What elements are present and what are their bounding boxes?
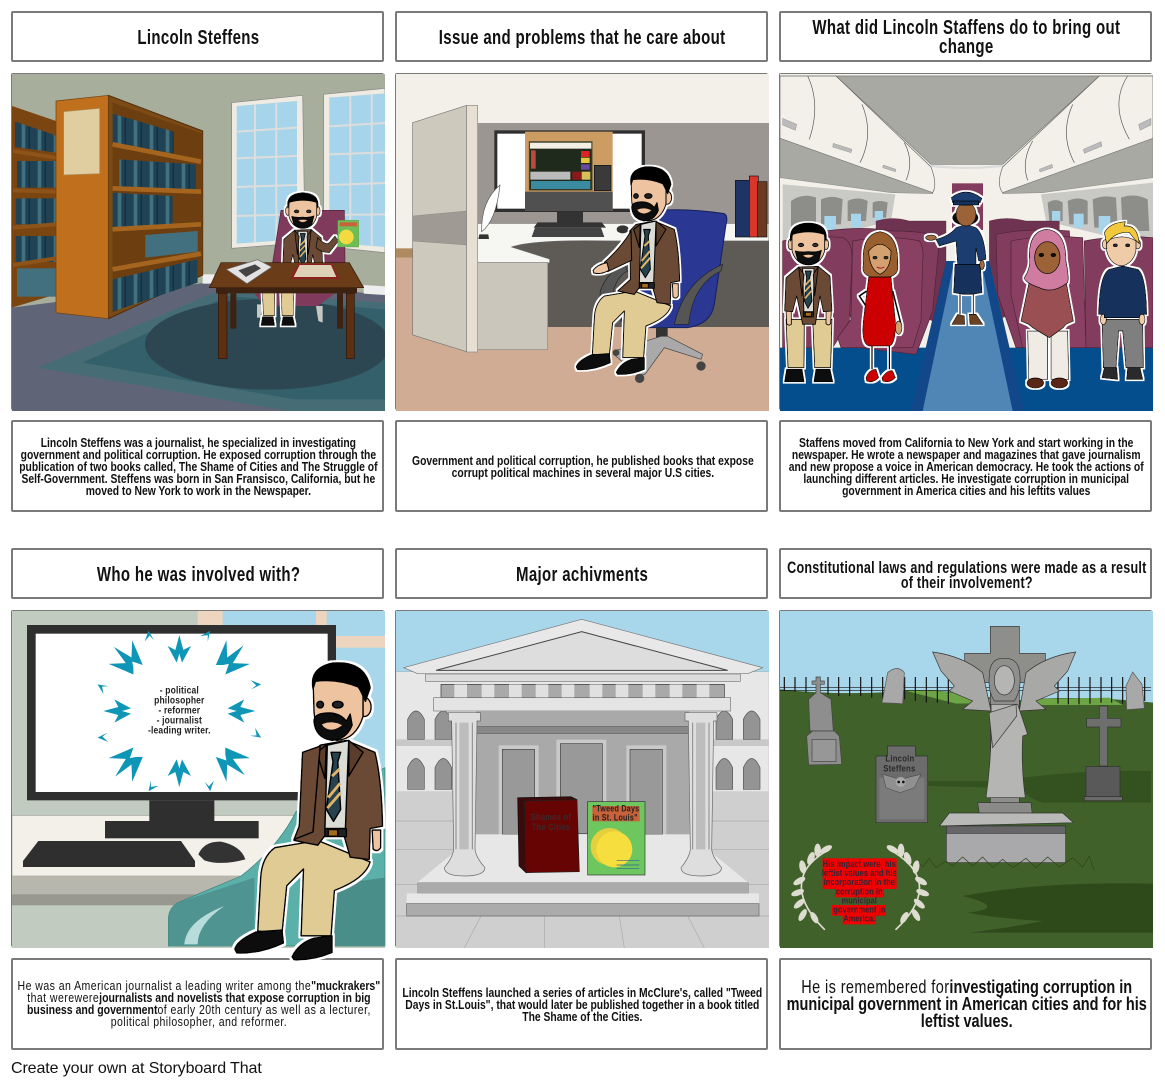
red impact note: municipal <box>842 896 877 906</box>
plaza floor <box>396 792 769 948</box>
front bookcase <box>56 95 203 319</box>
text: actions <box>779 420 1152 512</box>
character: Steffens at desk <box>261 193 338 325</box>
right column <box>681 713 722 876</box>
icon: quill <box>478 185 500 239</box>
red impact note: leftist values and his <box>822 868 897 878</box>
burst text: philosopher <box>154 695 205 706</box>
red impact note <box>822 858 897 924</box>
temple steps <box>407 834 759 916</box>
carpet and aisle <box>780 261 1153 411</box>
office chair <box>599 210 727 383</box>
desk <box>12 815 305 905</box>
left column <box>444 713 485 876</box>
green magazine: Tweed Days: in St. Louis" <box>593 813 638 823</box>
floor and rug <box>12 274 390 411</box>
character: flight attendant <box>926 192 986 324</box>
back bookcase <box>12 106 56 308</box>
character: woman in hijab <box>1021 229 1073 388</box>
title: Issue and problems: Issue and problems that he care about <box>439 26 726 48</box>
text: remembered: He is remembered forinvestigating corruption in <box>801 976 1132 996</box>
text: achievements: Days in St.Louis", that would later be published together in a book titled <box>405 997 760 1012</box>
text: Lincoln Steffens biography: government and political corruption. He exposed corruption through the <box>21 447 376 462</box>
text: Lincoln Steffens biography: Self-Government. Steffens was born in San Fransisco, California, but he <box>22 471 375 486</box>
text: involvement: business and governmentof early 20th century as well as a lecturer, <box>27 1002 370 1017</box>
text: actions: newspaper. He wrote a newspaper and magazines that gave journalism <box>792 447 1141 462</box>
character: blond man <box>1099 222 1147 379</box>
right cross <box>1084 706 1122 801</box>
burst text: - reformer <box>158 705 200 716</box>
laurel wreath <box>790 843 930 929</box>
text: achievements <box>395 958 768 1050</box>
text: issues <box>395 420 768 512</box>
iron fence <box>780 677 1151 704</box>
text: issues: corrupt political machines in several major U.S cities. <box>451 465 714 480</box>
character: Steffens large <box>235 663 383 960</box>
green magazine: Tweed Days <box>588 802 645 875</box>
armchair <box>254 210 345 323</box>
computer monitor <box>27 625 336 838</box>
text: actions: launching different articles. He investigate corruption in municipal <box>804 471 1129 486</box>
character: Steffens <box>785 223 833 382</box>
red impact note: corruption in <box>836 887 883 897</box>
panel: monitor with word burst <box>11 610 384 947</box>
title: Constitutional laws <box>779 548 1152 599</box>
overhead bins right <box>999 76 1153 194</box>
cabin ceiling <box>836 76 1099 169</box>
panel: airplane scene <box>779 73 1152 410</box>
cubicle wall and floor <box>396 123 769 411</box>
books on shelf <box>735 176 767 237</box>
small gravestones <box>882 668 1144 710</box>
gravestone: Lincoln Steffens <box>876 746 928 823</box>
burst text: -leading writer. <box>148 725 211 736</box>
text: involvement <box>11 958 384 1050</box>
title: Constitutional laws: of their involvement? <box>901 573 1032 592</box>
keyboard and mouse <box>23 841 245 867</box>
green magazine: Tweed Days: "Tweed Days <box>593 804 640 814</box>
title: Constitutional laws: Constitutional laws and regulations were made as a result <box>787 558 1146 577</box>
gravestone: Lincoln Steffens: Steffens <box>883 763 916 774</box>
text: achievements: The Shame of the Cities. <box>522 1009 643 1024</box>
title: Major achivments: Major achivments <box>516 564 649 586</box>
red book: Shames of The Cities <box>518 797 579 873</box>
stone angel statue <box>933 626 1076 863</box>
window behind monitor <box>198 611 385 771</box>
text: remembered: municipal government in American cities and for his <box>786 994 1147 1014</box>
text: involvement: political philosopher, and reformer. <box>110 1014 287 1029</box>
burst rays <box>95 628 263 794</box>
grass and shadows <box>780 689 1153 948</box>
red impact note: America. <box>843 914 875 924</box>
text: actions: and new propose a voice in American democracy. He took the actions of <box>789 459 1144 474</box>
red book: Shames of The Cities: Shames of <box>531 812 571 822</box>
panel: library scene <box>11 73 384 410</box>
panel: office scene <box>395 73 768 410</box>
passenger seats right <box>989 218 1153 348</box>
gravestone: Lincoln Steffens: Lincoln <box>885 753 914 763</box>
passenger seats left <box>783 218 946 354</box>
text: achievements: Lincoln Steffens launched a series of articles in McClure's, called "Tweed <box>403 985 762 1000</box>
desk with book and newspaper <box>209 260 364 359</box>
text: remembered <box>779 958 1152 1050</box>
title: Who he was involved with <box>11 548 384 599</box>
red impact note: government in <box>833 905 885 915</box>
temple back wall and doors <box>476 711 689 835</box>
cabin door <box>952 183 983 230</box>
panel: temple with books <box>395 610 768 947</box>
text: actions: government in America cities and his leftits values <box>842 483 1091 498</box>
text: Lincoln Steffens biography: Lincoln Steffens was a journalist, he specialized in investigating <box>41 435 356 450</box>
title: Who he was involved with: Who he was involved with? <box>97 564 300 586</box>
overhead bins left <box>780 76 935 194</box>
grass tuft <box>916 856 1094 871</box>
icon: green magazine <box>338 220 359 247</box>
computer monitor <box>494 130 645 224</box>
far-left cross gravestone <box>807 677 842 765</box>
text: actions: Staffens moved from California to New York and start working in the <box>799 435 1134 450</box>
title: Issue and problems <box>395 11 768 62</box>
text: Lincoln Steffens biography <box>11 420 384 512</box>
red impact note: His impact were, his <box>823 859 896 869</box>
desk and keyboard <box>478 222 769 350</box>
title: Lincoln Steffens: Lincoln Steffens <box>137 26 260 48</box>
burst text: - political <box>160 685 199 696</box>
character: Steffens seated <box>576 167 680 374</box>
side wings and arches <box>396 672 769 792</box>
character: woman in red dress <box>859 232 902 382</box>
teal armchair <box>168 768 385 946</box>
windows <box>232 88 385 253</box>
burst text: - journalist <box>157 715 202 726</box>
title: What did Lincoln Staffens do <box>779 11 1152 62</box>
text: involvement: He was an American journalist a leading writer among the"muckrakers" <box>17 978 380 993</box>
text: issues: Government and political corruption, he published books that expose <box>412 453 753 468</box>
text: Lincoln Steffens biography: publication of two books called, The Shame of Cities and The Struggle of <box>19 459 378 474</box>
red impact note: incorporation in the <box>824 877 895 887</box>
title: Major achivments <box>395 548 768 599</box>
title: What did Lincoln Staffens do: What did Lincoln Staffens do to bring out <box>813 17 1120 39</box>
footer credit: Create your own at Storyboard That <box>11 1060 262 1077</box>
temple roof <box>404 619 763 711</box>
panel: graveyard <box>779 610 1152 947</box>
title: Lincoln Steffens <box>11 11 384 62</box>
title: What did Lincoln Staffens do: change <box>939 36 994 58</box>
text: remembered: leftist values. <box>921 1010 1012 1030</box>
windows and side walls <box>783 183 1153 248</box>
text: Lincoln Steffens biography: moved to New York to work in the Newspaper. <box>86 483 311 498</box>
red book: Shames of The Cities: The Cities <box>532 822 570 832</box>
cubicle divider <box>413 105 478 352</box>
text: involvement: that werewerejournalists and novelists that expose corruption in big <box>27 990 370 1005</box>
